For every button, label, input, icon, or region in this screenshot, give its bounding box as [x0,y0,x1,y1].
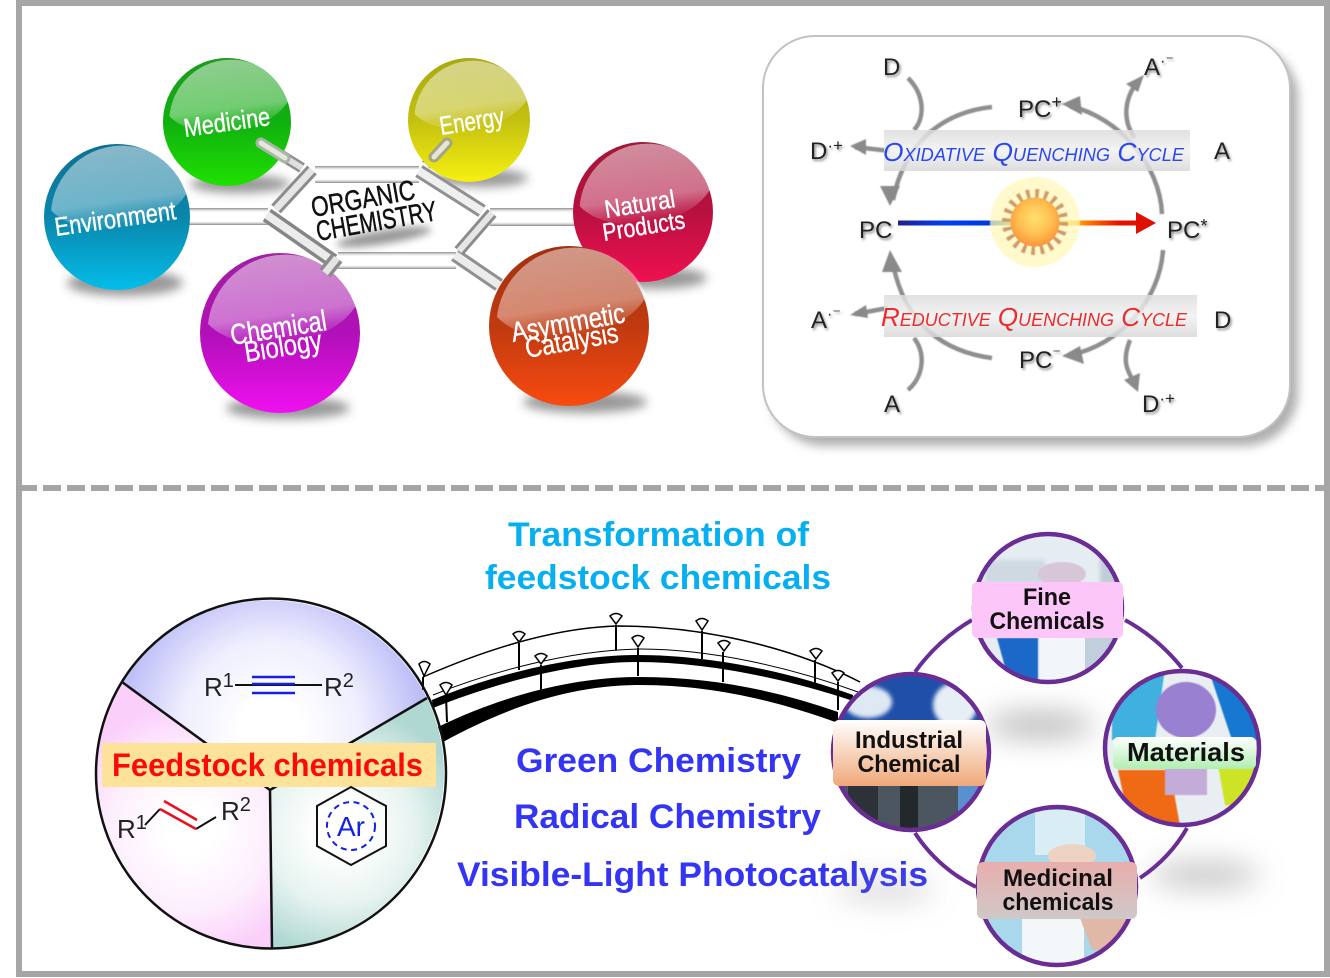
label: reductive quenching cycle: Reductive Quenching Cycle [881,302,1188,332]
structure: alkyne: 1 [223,670,234,692]
sphere shadows [67,169,707,419]
species labels: ·⁻ [1160,53,1174,70]
center label: organic chemistry: CHEMISTRY [314,195,439,247]
species labels: A [884,391,900,418]
connecting ring [915,620,1187,887]
rounded card [763,36,1298,446]
circle: industrial chemical [830,670,995,834]
text block: chemistry themes: Radical Chemistry [514,798,821,836]
circle: industrial chemical: Chemical [858,751,960,778]
wheel outline and spokes [96,598,446,948]
wheel sector: alkene [96,682,272,948]
bridge illustration [419,614,860,742]
label: oxidative quenching cycle: Oxidative Quenching Cycle [883,137,1185,167]
panel: product classes [830,530,1265,970]
species labels: ·⁻ [827,306,841,323]
circle: industrial chemical: Industrial [855,727,963,754]
sphere: asymmetric catalysis: Catalysis [523,317,621,364]
species labels: PC [1018,96,1051,123]
sphere: natural products: Natural [603,185,677,224]
catalytic cycle arcs [855,78,1163,390]
species labels: A [811,307,827,334]
sphere: medicine [163,58,291,186]
species labels: ·+ [1159,389,1175,408]
circle: medicinal chemicals [975,805,1140,970]
circle: medicinal chemicals: chemicals [1002,889,1114,916]
structure: alkene: R [221,796,240,826]
text block: chemistry themes [457,742,928,894]
hexagon bonds [180,142,576,285]
wheel sector: alkyne [122,600,427,790]
circle: materials: Materials [1127,737,1245,767]
sphere: natural products: Products [601,206,687,247]
circle: materials [1100,668,1265,826]
label: reductive quenching cycle [881,295,1197,337]
sphere: chemical biology: Biology [242,325,325,369]
icon: sun [990,177,1080,267]
text block: chemistry themes: Visible-Light Photocatalysis [457,856,928,894]
species labels: PC [1019,347,1052,374]
species labels: D [1214,307,1231,334]
panel: organic chemistry diagram [36,43,720,419]
sphere: medicine: Medicine [182,101,272,143]
dashed section divider [22,485,1324,491]
species labels: * [1200,216,1207,236]
structure: alkyne: R [324,672,343,702]
species labels: + [1051,92,1062,112]
structure: alkene [117,794,251,844]
structure: arene: Ar [337,811,365,842]
sphere: energy [408,58,530,182]
wheel sector: arene [270,698,444,948]
sphere: asymmetric catalysis [489,246,649,406]
heading: transformation of feedstock chemicals: Transformation of [508,516,810,554]
center label: organic chemistry [309,174,439,251]
sphere: chemical biology: Chemical [228,305,329,352]
species labels: D [883,54,900,81]
sphere: asymmetric catalysis: Asymmetic [509,297,627,348]
sphere: natural products [573,142,713,282]
species labels: PC [1167,217,1200,244]
species labels: D [1142,391,1159,418]
panel: feedstock chemicals wheel [96,598,446,948]
sphere: environment [44,144,190,290]
species labels: ·+ [827,136,843,155]
soft floor shadows [835,711,1260,902]
structure: alkene: 1 [136,812,147,834]
structure: alkene: R [117,814,136,844]
label: feedstock chemicals: Feedstock chemicals [112,747,423,783]
species labels: A [1144,54,1160,81]
arrow: light excitation [898,212,1156,234]
circle: fine chemicals: Fine [1023,584,1071,611]
sphere: energy: Energy [437,101,506,141]
text block: chemistry themes: Green Chemistry [516,742,801,780]
structure: alkyne: 2 [343,670,354,692]
species labels [810,53,1231,418]
sphere: chemical biology [200,253,360,413]
cycle arrowheads [850,75,1144,392]
structure: alkyne: R [204,672,223,702]
species labels: A [1214,138,1230,165]
structure: arene [317,787,386,865]
circle: fine chemicals [970,530,1130,685]
panel: photoredox quenching cycles [763,36,1298,446]
structure: alkene: 2 [240,794,251,816]
circle: medicinal chemicals: Medicinal [1003,865,1113,892]
species labels: D [810,138,827,165]
structure: alkyne [204,670,354,702]
heading: transformation of feedstock chemicals: feedstock chemicals [485,559,831,597]
center label: organic chemistry: ORGANIC [309,174,417,223]
species labels: PC [859,217,892,244]
heading: transformation of feedstock chemicals [485,516,831,597]
species labels: ⁻ [1052,346,1061,363]
sphere: environment: Environment [53,195,178,242]
circle: fine chemicals: Chemicals [990,608,1104,635]
